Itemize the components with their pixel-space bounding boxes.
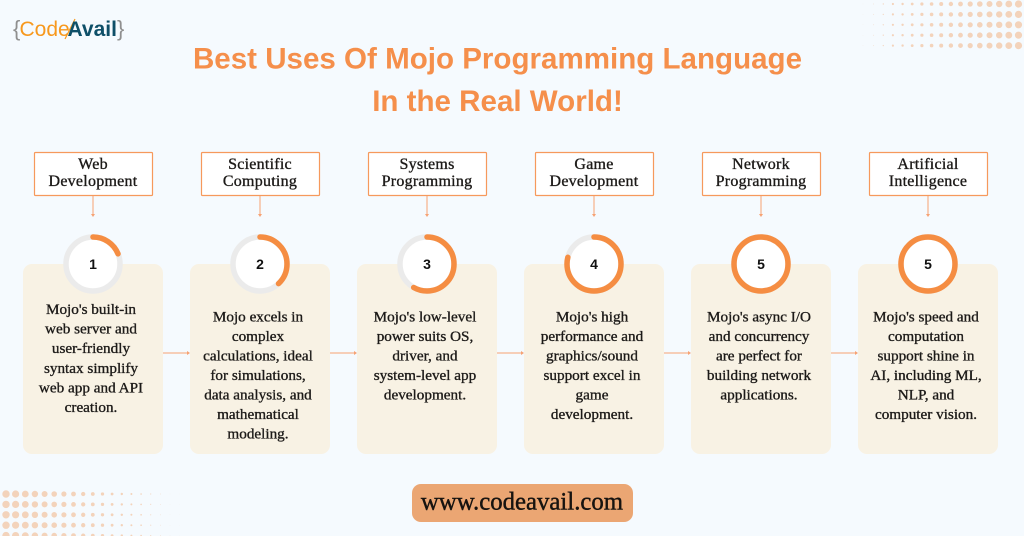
description <box>203 308 313 442</box>
description: system-level app <box>374 367 476 384</box>
description: Mojo excels in <box>213 308 304 326</box>
step ring 6: 5 <box>924 256 932 272</box>
step ring 6 <box>901 237 955 291</box>
description: support excel in <box>543 367 641 384</box>
description <box>374 308 476 404</box>
arrow <box>759 196 763 217</box>
heading box <box>870 152 988 196</box>
description: calculations, ideal <box>203 348 313 364</box>
heading box: Programming <box>382 173 472 190</box>
logo: CodeAvail: Code <box>20 18 70 41</box>
arrow <box>926 196 930 217</box>
step ring 2: 2 <box>256 256 264 272</box>
step ring 2 <box>233 237 287 291</box>
description: user-friendly <box>52 340 130 357</box>
step ring 1 <box>66 237 120 291</box>
description: applications. <box>720 386 798 404</box>
description <box>541 308 644 423</box>
arrow <box>592 196 596 217</box>
heading box <box>702 152 820 196</box>
decorative dots: top right <box>863 4 1018 48</box>
panel: 2 Scientific Computing <box>190 152 330 454</box>
title <box>193 42 802 118</box>
description: development. <box>551 406 633 423</box>
step ring 4: 4 <box>590 256 598 272</box>
description: data analysis, and <box>204 386 312 404</box>
description: modeling. <box>227 426 289 442</box>
card <box>691 264 831 454</box>
card <box>357 264 497 454</box>
step ring 4 <box>567 237 621 291</box>
heading box: Development <box>550 173 639 190</box>
panel: 1 Web Development <box>23 152 163 454</box>
heading box <box>34 152 152 196</box>
description: for simulations, <box>210 367 306 384</box>
heading box: Computing <box>223 173 297 190</box>
step ring 3 <box>400 237 454 291</box>
title: Best Uses Of Mojo Programming Language <box>193 42 802 76</box>
description: Mojo's built-in <box>46 301 136 318</box>
heading box: Programming <box>716 173 806 190</box>
description: Mojo's low-level <box>374 308 476 326</box>
description: Mojo's speed and <box>873 308 979 326</box>
description: mathematical <box>217 406 299 423</box>
description: driver, and <box>392 348 458 364</box>
heading box: Artificial <box>897 156 959 173</box>
logo: CodeAvail: Avail <box>68 18 117 41</box>
panel: 4 Game Development <box>524 152 664 454</box>
heading box: Web <box>78 156 108 173</box>
description: and concurrency <box>709 328 810 345</box>
heading box <box>536 152 654 196</box>
heading box: Game <box>574 156 614 173</box>
panel: 5 Network Programming <box>691 152 831 454</box>
website pill: www.codeavail.com <box>421 488 623 516</box>
description: computer vision. <box>875 406 977 423</box>
logo: CodeAvail: { <box>13 16 20 41</box>
description: graphics/sound <box>546 348 638 364</box>
card <box>858 264 998 454</box>
description: AI, including ML, <box>870 367 982 384</box>
card <box>190 264 330 454</box>
description: creation. <box>65 399 117 416</box>
heading box <box>202 152 320 196</box>
description <box>870 308 982 423</box>
step ring 5 <box>734 237 788 291</box>
description: building network <box>707 367 811 384</box>
logo: CodeAvail <box>13 16 124 41</box>
arrow <box>91 196 95 217</box>
description: web server and <box>45 320 137 338</box>
heading box: Development <box>49 173 138 190</box>
heading box: Network <box>732 156 790 173</box>
description <box>707 308 811 404</box>
card <box>524 264 664 454</box>
description: power suits OS, <box>377 328 473 345</box>
card <box>23 264 163 454</box>
arrow <box>425 196 429 217</box>
description: support shine in <box>877 348 975 364</box>
description: are perfect for <box>716 348 802 364</box>
panel: 6 Artificial Intelligence <box>858 152 998 454</box>
arrow <box>258 196 262 217</box>
logo: CodeAvail: } <box>117 16 124 41</box>
heading box <box>368 152 486 196</box>
description: Mojo's async I/O <box>707 308 811 326</box>
description <box>39 301 143 416</box>
description: game <box>576 386 609 404</box>
description: web app and API <box>39 380 143 396</box>
heading box: Intelligence <box>889 173 967 190</box>
title: In the Real World! <box>372 85 623 118</box>
panel: 3 Systems Programming <box>357 152 497 454</box>
description: Mojo's high <box>556 308 629 326</box>
description: performance and <box>541 328 644 345</box>
description: development. <box>384 386 466 404</box>
heading box: Scientific <box>228 156 292 173</box>
step ring 1: 1 <box>89 256 97 272</box>
step ring 5: 5 <box>757 256 765 272</box>
description: computation <box>888 328 964 345</box>
description: syntax simplify <box>44 360 138 377</box>
description: complex <box>232 328 285 345</box>
connector arrows between cards <box>163 351 858 355</box>
website pill <box>412 484 633 522</box>
heading box: Systems <box>399 156 455 173</box>
decorative dots: bottom left <box>6 494 180 536</box>
step ring 3: 3 <box>423 256 431 272</box>
description: NLP, and <box>898 386 955 404</box>
